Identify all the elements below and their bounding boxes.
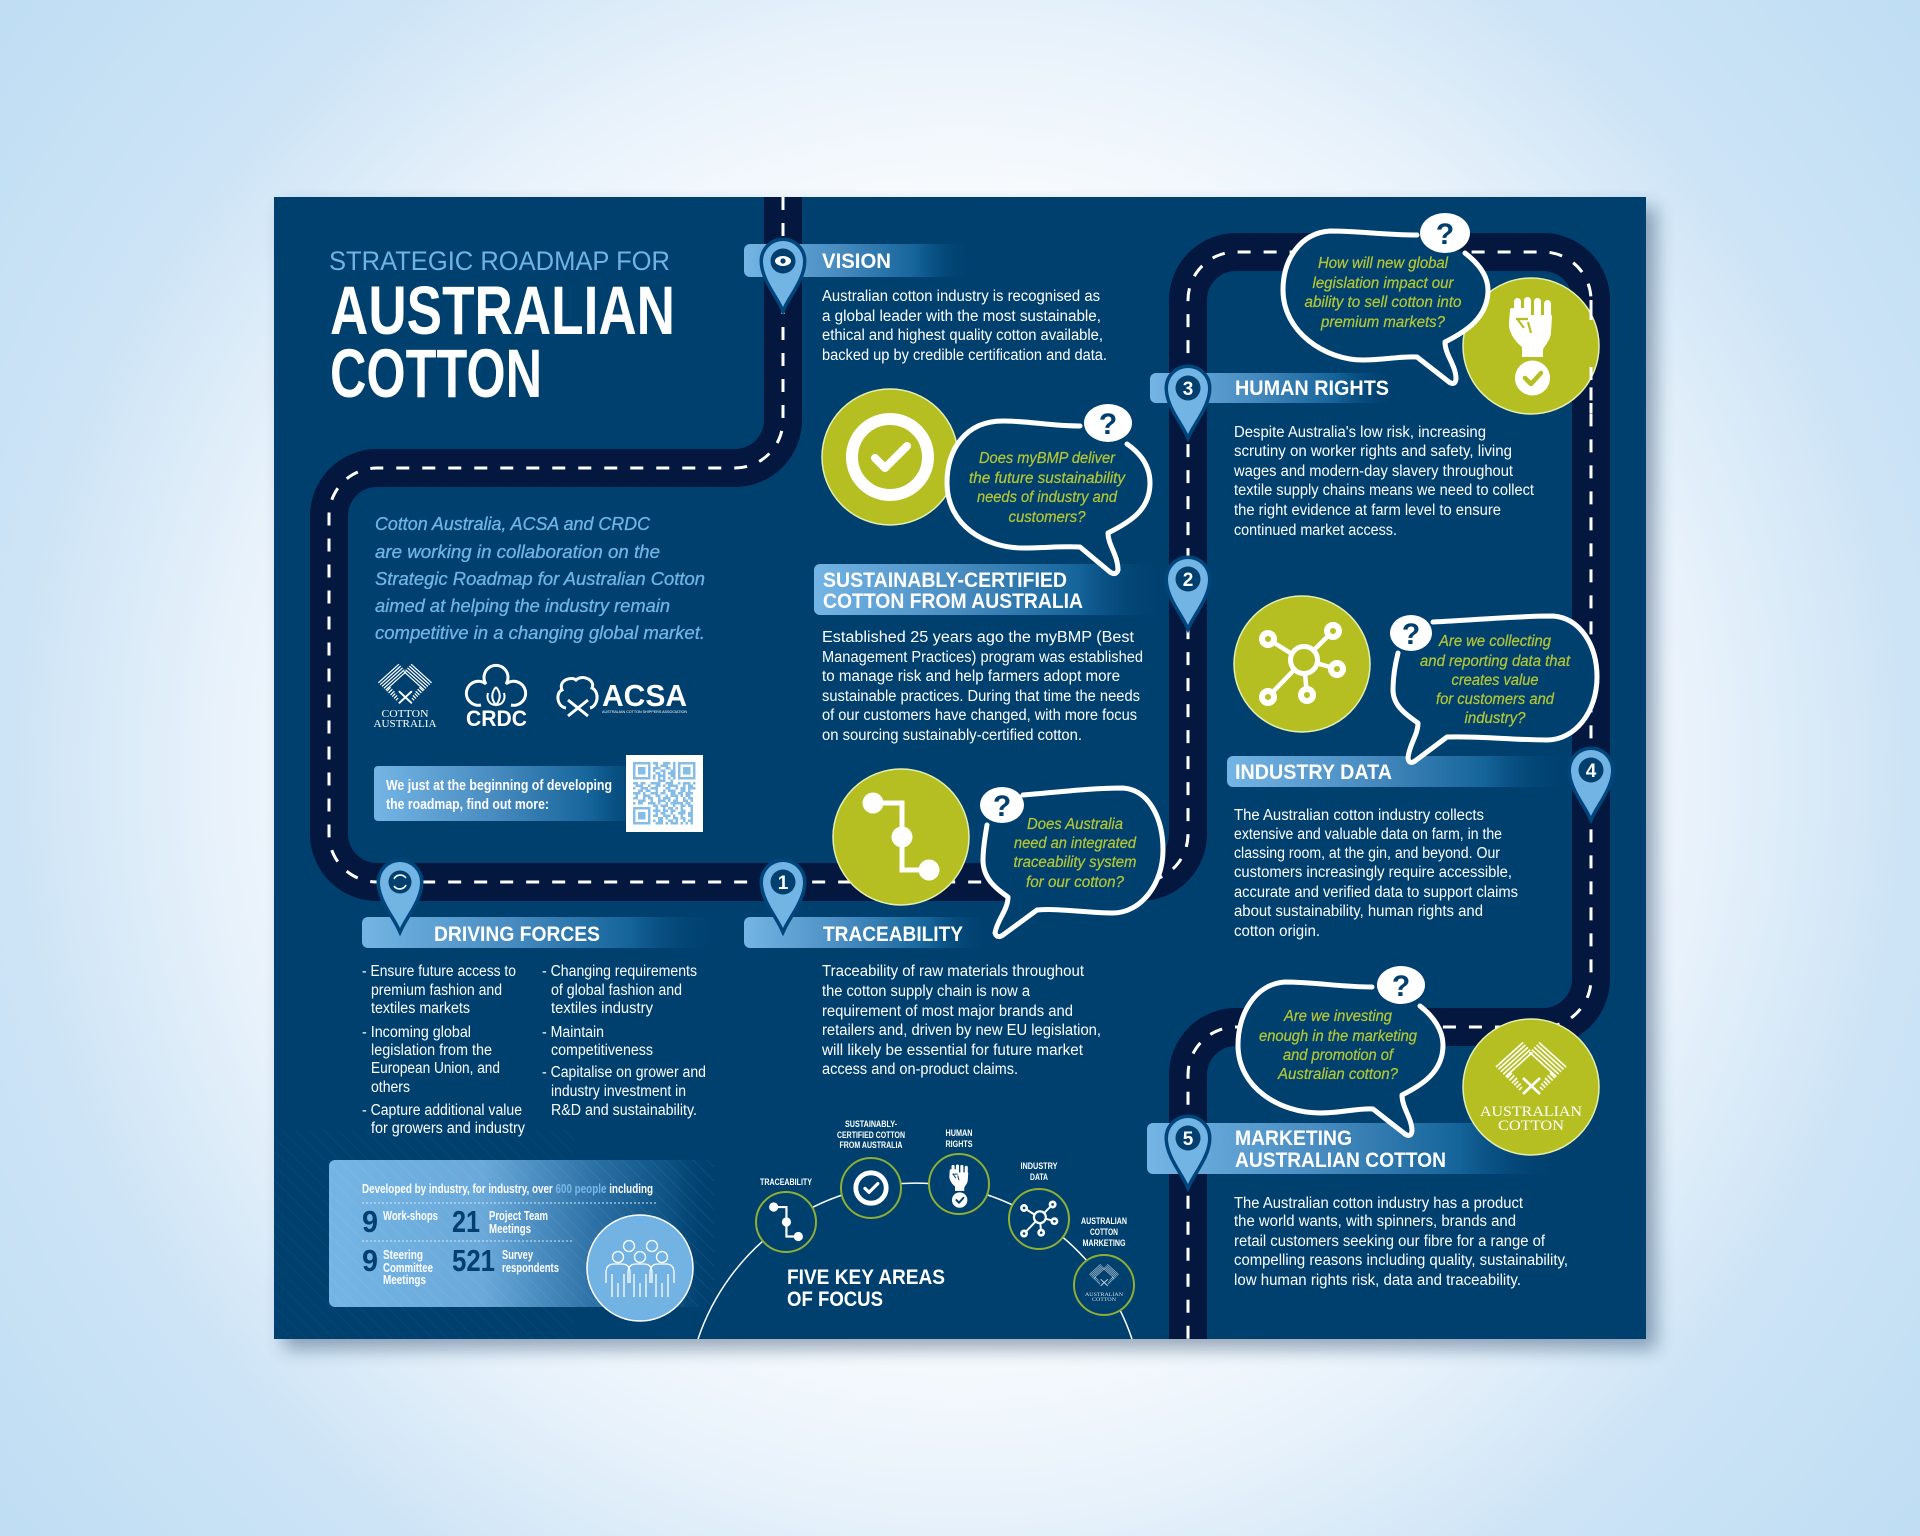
icon: traceability xyxy=(833,769,969,905)
panel: stats: 21 xyxy=(452,1204,480,1239)
panel: stats: Meetings xyxy=(489,1221,531,1236)
road xyxy=(329,197,1591,1339)
text: marketing: the world wants, with spinners, brands and xyxy=(1234,1213,1516,1230)
heading bar: traceability xyxy=(744,917,990,948)
text: driving forces left column: - Capture additional value xyxy=(362,1102,522,1119)
speech bubble: marketing: Australian cotton? xyxy=(1277,1066,1398,1083)
focus: traceability: TRACEABILITY xyxy=(760,1177,812,1187)
speech bubble: industry data: ? xyxy=(1402,618,1420,651)
icon: certified check xyxy=(822,389,958,525)
text: sustainably-certified cotton: on sourcing sustainably-certified cotton. xyxy=(822,727,1082,744)
pin: 5 xyxy=(1168,1118,1208,1184)
speech bubble: human rights: premium markets? xyxy=(1320,314,1445,331)
text: vision: backed up by credible certification and data. xyxy=(822,347,1107,364)
text: marketing: compelling reasons including quality, sustainability, xyxy=(1234,1252,1568,1269)
text: industry data xyxy=(1234,807,1518,940)
heading bar: industry data xyxy=(1227,756,1570,787)
intro text: are working in collaboration on the xyxy=(375,542,660,562)
panel: stats: Work-shops xyxy=(383,1208,438,1223)
focus: human rights: HUMAN xyxy=(946,1128,972,1138)
pin: vision xyxy=(763,241,803,307)
text: driving forces right column: - Maintain xyxy=(542,1024,604,1041)
intro text: aimed at helping the industry remain xyxy=(375,596,670,616)
panel: stats: Committee xyxy=(383,1260,433,1275)
heading bar: sustainably-certified cotton: COTTON FROM AUSTRALIA xyxy=(823,590,1083,613)
text: driving forces right column: R&D and sustainability. xyxy=(551,1102,697,1119)
panel: stats: Developed by industry, for industry, over 600 people including xyxy=(362,1181,653,1196)
pin: 1 xyxy=(763,862,803,928)
title: COTTON xyxy=(330,335,542,412)
logo: ACSA: ACSA xyxy=(602,678,687,713)
speech bubble: marketing: and promotion of xyxy=(1283,1047,1395,1064)
text: human rights xyxy=(1233,424,1535,539)
text: marketing: low human rights risk, data and traceability. xyxy=(1234,1272,1521,1289)
text: industry data: classing room, at the gin, and beyond. Our xyxy=(1234,845,1500,862)
title: AUSTRALIAN xyxy=(330,272,675,349)
text: traceability: Traceability of raw materials throughout xyxy=(822,963,1085,980)
focus: traceability xyxy=(756,1177,816,1252)
text: driving forces right column: industry investment in xyxy=(551,1083,686,1100)
text: driving forces left column: premium fashion and xyxy=(371,982,502,999)
speech bubble: marketing: Are we investing xyxy=(1283,1008,1392,1025)
text: driving forces right column xyxy=(542,963,706,1119)
text: industry data: about sustainability, human rights and xyxy=(1234,903,1483,920)
intro text: Cotton Australia, ACSA and CRDC xyxy=(375,514,651,534)
pin: 4: 4 xyxy=(1586,761,1597,782)
focus: marketing: COTTON xyxy=(1092,1297,1116,1303)
speech bubble: myBMP: customers? xyxy=(1008,509,1086,526)
icon: Australian Cotton logo: AUSTRALIAN xyxy=(1480,1104,1582,1120)
pin: 5: 5 xyxy=(1183,1129,1194,1150)
panel: roadmap board shadow xyxy=(284,207,1656,1349)
text: driving forces right column: - Changing requirements xyxy=(542,963,697,980)
text: traceability: retailers and, driven by new EU legislation, xyxy=(822,1022,1101,1039)
text: driving forces left column: - Incoming global xyxy=(362,1024,471,1041)
text: driving forces left column: - Ensure future access to xyxy=(362,963,516,980)
panel: stats: 521 xyxy=(452,1243,495,1278)
focus: sustainably-certified: FROM AUSTRALIA xyxy=(840,1140,903,1150)
text: industry data: cotton origin. xyxy=(1234,923,1320,940)
text: vision: ethical and highest quality cotton available, xyxy=(822,327,1103,344)
speech bubble: human rights: How will new global xyxy=(1318,255,1449,272)
text: marketing: The Australian cotton industry has a product xyxy=(1234,1195,1524,1212)
icon: industry data xyxy=(1234,596,1370,732)
panel: stats: Steering xyxy=(383,1247,423,1262)
speech bubble: industry data: and reporting data that xyxy=(1420,653,1571,670)
focus: marketing: MARKETING xyxy=(1082,1238,1126,1248)
panel: stats: Project Team xyxy=(489,1208,548,1223)
text: industry data: The Australian cotton industry collects xyxy=(1234,807,1484,824)
text: human rights: wages and modern-day slavery throughout xyxy=(1233,463,1514,480)
intro text xyxy=(375,514,705,643)
heading bar: vision xyxy=(744,244,973,277)
text: sustainably-certified cotton: Management Practices) program was established xyxy=(822,649,1143,666)
text: vision: Australian cotton industry is recognised as xyxy=(822,288,1100,305)
icon: human rights fist xyxy=(1463,278,1599,414)
text: vision xyxy=(822,288,1107,364)
text: sustainably-certified cotton: to manage risk and help farmers adopt more xyxy=(822,668,1120,685)
text: industry data: accurate and verified data to support claims xyxy=(1234,884,1518,901)
speech bubble: human rights: ability to sell cotton into xyxy=(1304,294,1462,311)
text: traceability xyxy=(821,963,1101,1078)
panel: roadmap board xyxy=(274,197,1646,1339)
pin: 4 xyxy=(1571,750,1611,816)
text: sustainably-certified cotton: of our customers have changed, with more focus xyxy=(822,707,1137,724)
focus: marketing: COTTON xyxy=(1090,1227,1118,1237)
text: human rights: continued market access. xyxy=(1234,522,1397,539)
focus: human rights: RIGHTS xyxy=(946,1139,972,1149)
text: human rights: Despite Australia's low risk, increasing xyxy=(1234,424,1486,441)
panel: stats: Meetings xyxy=(383,1272,426,1287)
text: driving forces left column: legislation from the xyxy=(371,1042,492,1059)
pin: driving forces xyxy=(380,862,420,928)
intro text: competitive in a changing global market. xyxy=(375,623,705,643)
text: traceability: requirement of most major brands and xyxy=(822,1003,1073,1020)
text: driving forces left column: others xyxy=(371,1079,410,1096)
focus: sustainably-certified: CERTIFIED COTTON xyxy=(837,1130,905,1140)
text: vision: a global leader with the most sustainable, xyxy=(822,308,1101,325)
text: driving forces left column: textiles markets xyxy=(371,1000,470,1017)
speech bubble: industry data: creates value xyxy=(1452,672,1539,689)
icon: people xyxy=(587,1215,693,1321)
logo: CRDC: CRDC xyxy=(466,706,527,731)
speech bubble: traceability: need an integrated xyxy=(1014,835,1137,852)
text: traceability: access and on-product claims. xyxy=(822,1061,1018,1078)
panel: stats: 9 xyxy=(362,1243,378,1278)
speech bubble: traceability: Does Australia xyxy=(1027,816,1123,833)
text: industry data: customers increasingly require accessible, xyxy=(1234,864,1512,881)
speech bubble: marketing xyxy=(1238,966,1443,1135)
text: human rights: scrutiny on worker rights and safety, living xyxy=(1234,443,1512,460)
logo: ACSA xyxy=(558,678,687,716)
heading bar: driving forces: DRIVING FORCES xyxy=(434,923,600,946)
panel: stats: respondents xyxy=(502,1260,559,1275)
speech bubble: myBMP: the future sustainability xyxy=(969,470,1126,487)
logo: Cotton Australia: COTTON xyxy=(382,709,429,720)
text: traceability: the cotton supply chain is now a xyxy=(822,983,1030,1000)
logo: Cotton Australia: AUSTRALIA xyxy=(374,719,437,730)
heading bar: sustainably-certified cotton: SUSTAINABLY-CERTIFIED xyxy=(823,569,1067,592)
logo: CRDC xyxy=(466,665,527,731)
callout: find out more xyxy=(374,766,664,821)
speech bubble: human rights: ? xyxy=(1436,218,1454,251)
speech bubble: traceability: for our cotton? xyxy=(1026,874,1124,891)
text: driving forces left column xyxy=(362,963,525,1137)
focus: sustainably-certified xyxy=(837,1119,905,1218)
focus: industry data xyxy=(1009,1161,1069,1249)
heading bar: marketing xyxy=(1147,1123,1563,1174)
logo: Cotton Australia xyxy=(374,664,437,730)
text: marketing: retail customers seeking our fibre for a range of xyxy=(1234,1233,1546,1250)
title xyxy=(329,246,675,412)
speech bubble: myBMP: Does myBMP deliver xyxy=(979,450,1116,467)
speech bubble: traceability: ? xyxy=(993,790,1011,823)
intro text: Strategic Roadmap for Australian Cotton xyxy=(375,569,705,589)
panel: stats: 9 xyxy=(362,1204,378,1239)
panel texture xyxy=(274,1130,574,1339)
heading bar: traceability: TRACEABILITY xyxy=(823,923,963,946)
text: sustainably-certified cotton: sustainable practices. During that time the needs xyxy=(822,688,1140,705)
heading bar: sustainably-certified cotton xyxy=(814,564,1167,615)
speech bubble: marketing: ? xyxy=(1392,970,1410,1003)
pin: 2: 2 xyxy=(1183,570,1193,591)
text: driving forces right column: - Capitalise on grower and xyxy=(542,1064,706,1081)
focus: industry data: INDUSTRY xyxy=(1020,1161,1058,1171)
text: traceability: will likely be essential for future market xyxy=(821,1042,1084,1059)
speech bubble: human rights: legislation impact our xyxy=(1312,275,1454,292)
heading bar: driving forces xyxy=(362,917,720,948)
text: sustainably-certified cotton: Established 25 years ago the myBMP (Best xyxy=(822,629,1135,646)
text: driving forces left column: for growers and industry xyxy=(371,1120,525,1137)
icon: Australian Cotton logo xyxy=(1463,1019,1599,1155)
speech bubble: industry data: Are we collecting xyxy=(1438,633,1551,650)
text: sustainably-certified cotton xyxy=(822,629,1143,744)
QR code xyxy=(626,755,703,832)
text: human rights: the right evidence at farm level to ensure xyxy=(1234,502,1501,519)
heading bar: human rights: HUMAN RIGHTS xyxy=(1235,377,1389,400)
speech bubble: traceability xyxy=(980,787,1163,937)
heading bar: marketing: AUSTRALIAN COTTON xyxy=(1235,1149,1446,1172)
text: marketing xyxy=(1234,1195,1568,1289)
diagram: five key areas of focus: OF FOCUS xyxy=(787,1288,883,1311)
pin: 3 xyxy=(1168,368,1208,434)
heading bar: marketing: MARKETING xyxy=(1235,1127,1352,1150)
focus: human rights xyxy=(929,1128,989,1214)
callout: find out more: the roadmap, find out more: xyxy=(386,797,549,813)
speech bubble: industry data: industry? xyxy=(1464,710,1526,727)
speech bubble: myBMP xyxy=(947,404,1150,574)
speech bubble: myBMP: needs of industry and xyxy=(977,489,1118,506)
text: driving forces left column: European Union, and xyxy=(371,1060,500,1077)
title: STRATEGIC ROADMAP FOR xyxy=(329,246,670,276)
pin: 2 xyxy=(1168,559,1208,625)
callout: find out more: We just at the beginning of developing xyxy=(386,778,612,794)
panel: stats xyxy=(329,1160,714,1307)
focus: sustainably-certified: SUSTAINABLY- xyxy=(845,1119,897,1129)
speech bubble: myBMP: ? xyxy=(1099,408,1117,441)
panel: stats: Survey xyxy=(502,1247,534,1262)
heading bar: vision: VISION xyxy=(822,250,891,273)
focus: marketing: AUSTRALIAN xyxy=(1085,1292,1123,1298)
pin: 3: 3 xyxy=(1183,379,1193,400)
text: driving forces right column: textiles industry xyxy=(551,1000,653,1017)
text: industry data: extensive and valuable data on farm, in the xyxy=(1234,826,1502,843)
logo: ACSA: AUSTRALIAN COTTON SHIPPERS ASSOCIATION xyxy=(602,709,687,714)
diagram: five key areas of focus xyxy=(698,1119,1134,1339)
speech bubble: marketing: enough in the marketing xyxy=(1259,1028,1417,1045)
heading bar: industry data: INDUSTRY DATA xyxy=(1235,761,1392,784)
speech bubble: industry data: for customers and xyxy=(1436,691,1555,708)
speech bubble: industry data xyxy=(1390,615,1597,762)
speech bubble: human rights xyxy=(1283,213,1488,383)
diagram: five key areas of focus: FIVE KEY AREAS xyxy=(787,1266,945,1289)
text: driving forces right column: of global fashion and xyxy=(551,982,682,999)
text: driving forces right column: competitiveness xyxy=(551,1042,653,1059)
text: human rights: textile supply chains means we need to collect xyxy=(1234,482,1535,499)
heading bar: human rights xyxy=(1150,373,1397,403)
pin: 1: 1 xyxy=(778,873,789,894)
speech bubble: traceability: traceability system xyxy=(1014,854,1137,871)
focus: industry data: DATA xyxy=(1030,1172,1048,1182)
focus: marketing: AUSTRALIAN xyxy=(1081,1216,1127,1226)
focus: marketing xyxy=(1074,1216,1134,1315)
icon: Australian Cotton logo: COTTON xyxy=(1498,1118,1564,1134)
